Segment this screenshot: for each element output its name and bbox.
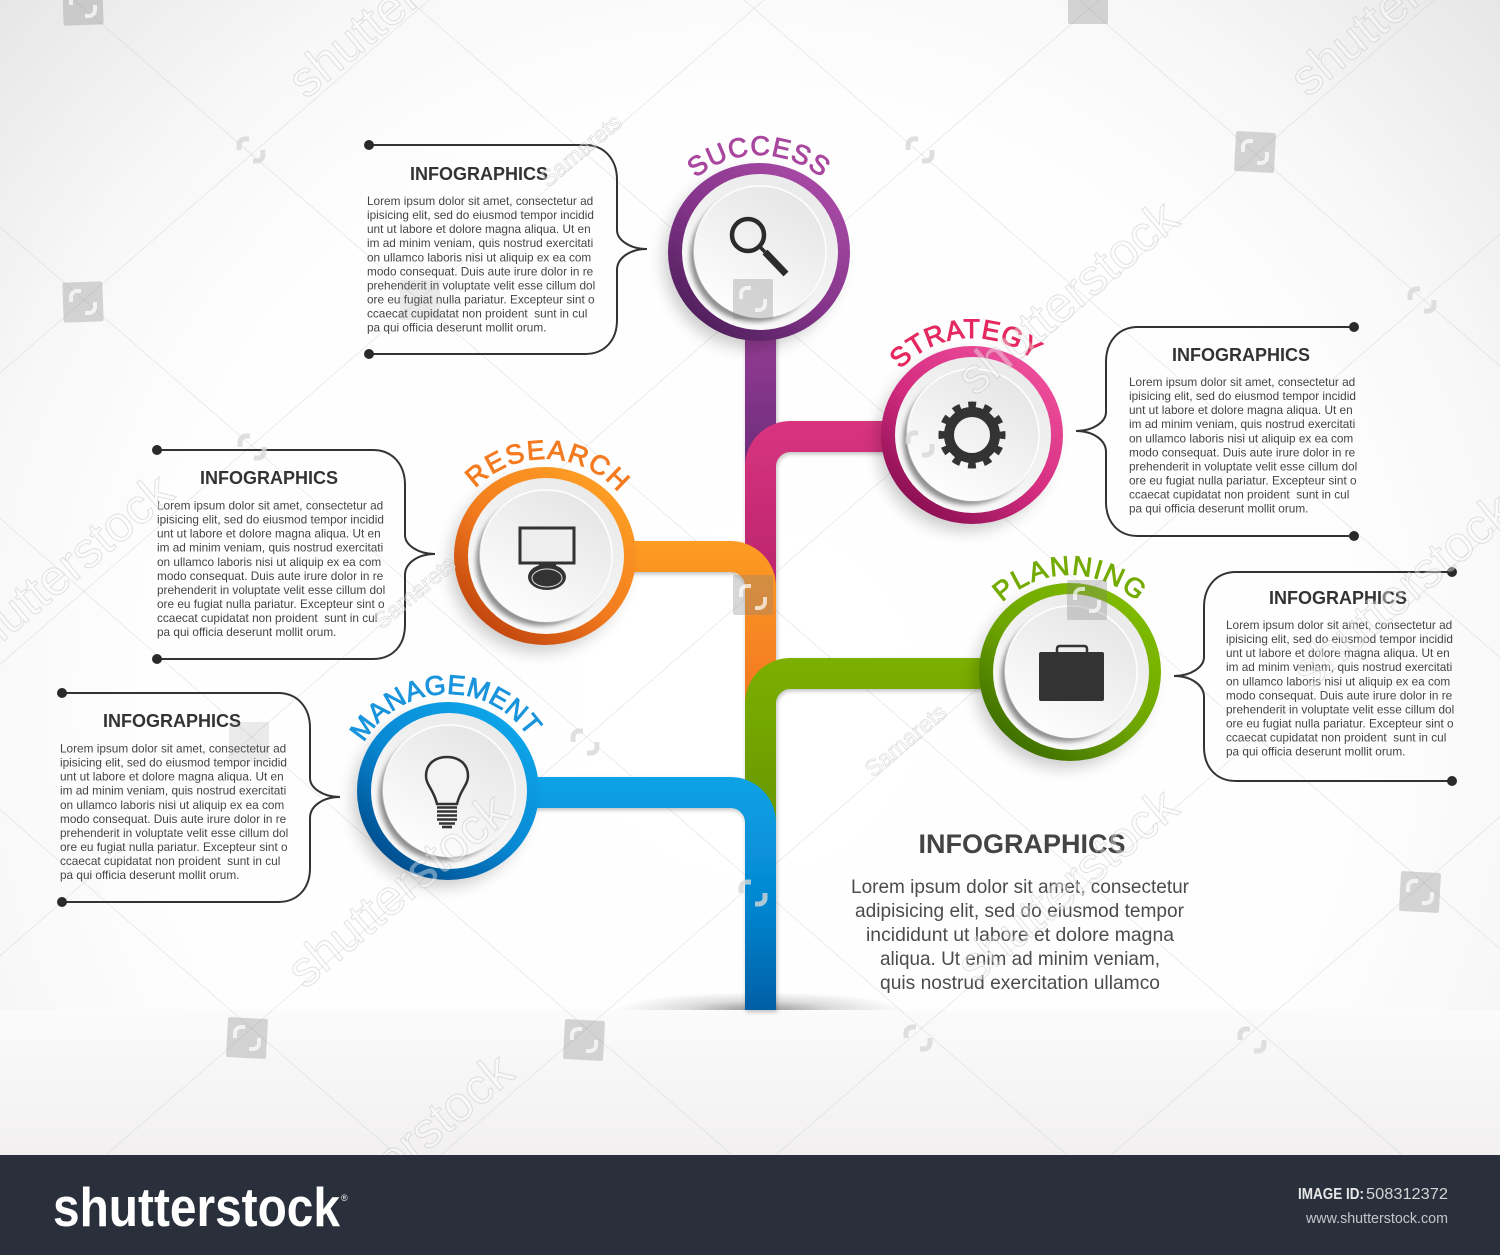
node: planning <box>969 556 1161 775</box>
panel: success text: unt ut labore et dolore magna aliqua. Ut en <box>367 222 591 236</box>
node: success <box>657 136 850 354</box>
panel: strategy text: prehenderit in voluptate velit esse cillum dol <box>1129 459 1357 473</box>
panel: strategy text: on ullamco laboris nisi ut aliquip ex ea com <box>1129 431 1353 445</box>
panel: success text: modo consequat. Duis aute irure dolor in re <box>367 264 594 278</box>
branch: magenta <box>760 436 890 600</box>
panel: planning text: prehenderit in voluptate velit esse cillum dol <box>1226 702 1454 716</box>
panel: research text: im ad minim veniam, quis nostrud exercitati <box>157 541 383 555</box>
footer url: www.shutterstock.com <box>1305 1210 1448 1227</box>
watermarks: shutterstock <box>281 1042 524 1255</box>
panel: strategy text: modo consequat. Duis aute irure dolor in re <box>1129 445 1356 459</box>
image id: IMAGE ID: <box>1298 1186 1364 1203</box>
panel: success text: on ullamco laboris nisi ut aliquip ex ea com <box>367 250 591 264</box>
panel: planning text: ccaecat cupidatat non proident sunt in cul <box>1226 731 1446 745</box>
watermarks: shutterstock <box>946 777 1189 993</box>
label: research: RESEARCH <box>464 440 630 492</box>
main text block: Lorem ipsum dolor sit amet, consectetur <box>851 876 1189 898</box>
panel: planning text: im ad minim veniam, quis nostrud exercitati <box>1226 660 1452 674</box>
branch: blue <box>530 792 760 1010</box>
main text block: adipisicing elit, sed do eiusmod tempor <box>855 900 1184 922</box>
watermarks: shutterstock <box>946 189 1189 405</box>
trunk ground shadow <box>632 994 888 1010</box>
footer registered mark: ® <box>341 1193 348 1203</box>
panel: success text: ipisicing elit, sed do eiusmod tempor incidid <box>367 208 594 222</box>
panel: success text: im ad minim veniam, quis nostrud exercitati <box>367 236 593 250</box>
main text block: quis nostrud exercitation ullamco <box>880 972 1160 994</box>
footer bar <box>0 1155 1500 1255</box>
panel: research text: Lorem ipsum dolor sit amet, consectetur ad <box>157 498 383 512</box>
panel: planning text: ipisicing elit, sed do eiusmod tempor incidid <box>1226 632 1453 646</box>
panel: management text: unt ut labore et dolore magna aliqua. Ut en <box>60 770 284 784</box>
panel: research text: ore eu fugiat nulla pariatur. Excepteur sint o <box>157 597 385 611</box>
panel: research text: prehenderit in voluptate velit esse cillum dol <box>157 583 385 597</box>
panel: strategy text <box>1076 322 1359 541</box>
footer logo: shutterstock <box>53 1176 340 1238</box>
tree trunk and branches <box>530 330 990 1010</box>
branch: green <box>760 674 990 840</box>
panel: research text <box>152 445 435 664</box>
main text block: incididunt ut labore et dolore magna <box>866 924 1174 946</box>
label: planning: PLANNING <box>991 556 1145 602</box>
panel: planning text: Lorem ipsum dolor sit amet, consectetur ad <box>1226 618 1452 632</box>
icon: magnifier <box>732 219 786 274</box>
icon: gear <box>942 405 1002 465</box>
panel: strategy text: Lorem ipsum dolor sit amet, consectetur ad <box>1129 375 1355 389</box>
watermarks: Samarets <box>369 551 461 634</box>
panel: planning text: unt ut labore et dolore magna aliqua. Ut en <box>1226 646 1450 660</box>
panel: management text: ore eu fugiat nulla pariatur. Excepteur sint o <box>60 840 288 854</box>
panel: management text: on ullamco laboris nisi ut aliquip ex ea com <box>60 798 284 812</box>
watermarks: Samarets <box>535 109 627 192</box>
branch: purple <box>745 330 776 470</box>
label: strategy: STRATEGY <box>890 319 1044 367</box>
main text block <box>851 829 1189 994</box>
node: management <box>346 674 544 894</box>
main text block: INFOGRAPHICS <box>918 829 1126 859</box>
panel: strategy text: pa qui officia deserunt mollit orum. <box>1129 502 1308 516</box>
panel: strategy text: ipisicing elit, sed do eiusmod tempor incidid <box>1129 389 1356 403</box>
panel: planning text <box>1174 567 1457 786</box>
panel: management text: INFOGRAPHICS <box>103 711 241 731</box>
watermarks: shutterstock <box>276 782 519 998</box>
panel: research text: unt ut labore et dolore magna aliqua. Ut en <box>157 527 381 541</box>
branch: orange <box>630 556 760 720</box>
icon: briefcase <box>1039 646 1104 701</box>
main text block: aliqua. Ut enim ad minim veniam, <box>880 948 1160 970</box>
floor <box>0 1010 1500 1155</box>
label: management: MANAGEMENT <box>349 674 544 742</box>
panel: research text: on ullamco laboris nisi ut aliquip ex ea com <box>157 555 381 569</box>
label: success: SUCCESS <box>688 136 830 176</box>
panel: management text: modo consequat. Duis aute irure dolor in re <box>60 812 287 826</box>
watermarks: Samarets <box>860 699 952 782</box>
icon: monitor <box>520 528 574 590</box>
panel: research text: ipisicing elit, sed do eiusmod tempor incidid <box>157 513 384 527</box>
panel: management text: im ad minim veniam, quis nostrud exercitati <box>60 784 286 798</box>
panel: management text: pa qui officia deserunt mollit orum. <box>60 868 239 882</box>
panel: success text: prehenderit in voluptate velit esse cillum dol <box>367 278 595 292</box>
panel: planning text: INFOGRAPHICS <box>1269 588 1407 608</box>
node: strategy <box>870 319 1063 538</box>
panel: planning text: modo consequat. Duis aute irure dolor in re <box>1226 688 1453 702</box>
panel: research text: modo consequat. Duis aute irure dolor in re <box>157 569 384 583</box>
panel: research text: pa qui officia deserunt mollit orum. <box>157 625 336 639</box>
node: research <box>443 440 635 659</box>
image id number: 508312372 <box>1366 1186 1448 1203</box>
panel: planning text: pa qui officia deserunt mollit orum. <box>1226 745 1405 759</box>
panel: strategy text: unt ut labore et dolore magna aliqua. Ut en <box>1129 403 1353 417</box>
panel: management text: ipisicing elit, sed do eiusmod tempor incidid <box>60 756 287 770</box>
panel: planning text: ore eu fugiat nulla pariatur. Excepteur sint o <box>1226 716 1454 730</box>
panel: management text: prehenderit in voluptate velit esse cillum dol <box>60 826 288 840</box>
panel: success text: INFOGRAPHICS <box>410 164 548 184</box>
panel: strategy text: INFOGRAPHICS <box>1172 345 1310 365</box>
panel: management text: Lorem ipsum dolor sit amet, consectetur ad <box>60 742 286 756</box>
panel: strategy text: ore eu fugiat nulla pariatur. Excepteur sint o <box>1129 473 1357 487</box>
panel: success text <box>364 140 647 359</box>
panel: strategy text: im ad minim veniam, quis nostrud exercitati <box>1129 417 1355 431</box>
panel: planning text: on ullamco laboris nisi ut aliquip ex ea com <box>1226 674 1450 688</box>
panel: research text: ccaecat cupidatat non proident sunt in cul <box>157 611 377 625</box>
panel: success text: ccaecat cupidatat non proident sunt in cul <box>367 307 587 321</box>
panel: success text: Lorem ipsum dolor sit amet, consectetur ad <box>367 194 593 208</box>
panel: success text: pa qui officia deserunt mollit orum. <box>367 321 546 335</box>
panel: management text <box>57 688 340 907</box>
panel: management text: ccaecat cupidatat non proident sunt in cul <box>60 854 280 868</box>
panel: strategy text: ccaecat cupidatat non proident sunt in cul <box>1129 488 1349 502</box>
icon: light bulb <box>426 757 468 827</box>
panel: research text: INFOGRAPHICS <box>200 468 338 488</box>
panel: success text: ore eu fugiat nulla pariatur. Excepteur sint o <box>367 292 595 306</box>
